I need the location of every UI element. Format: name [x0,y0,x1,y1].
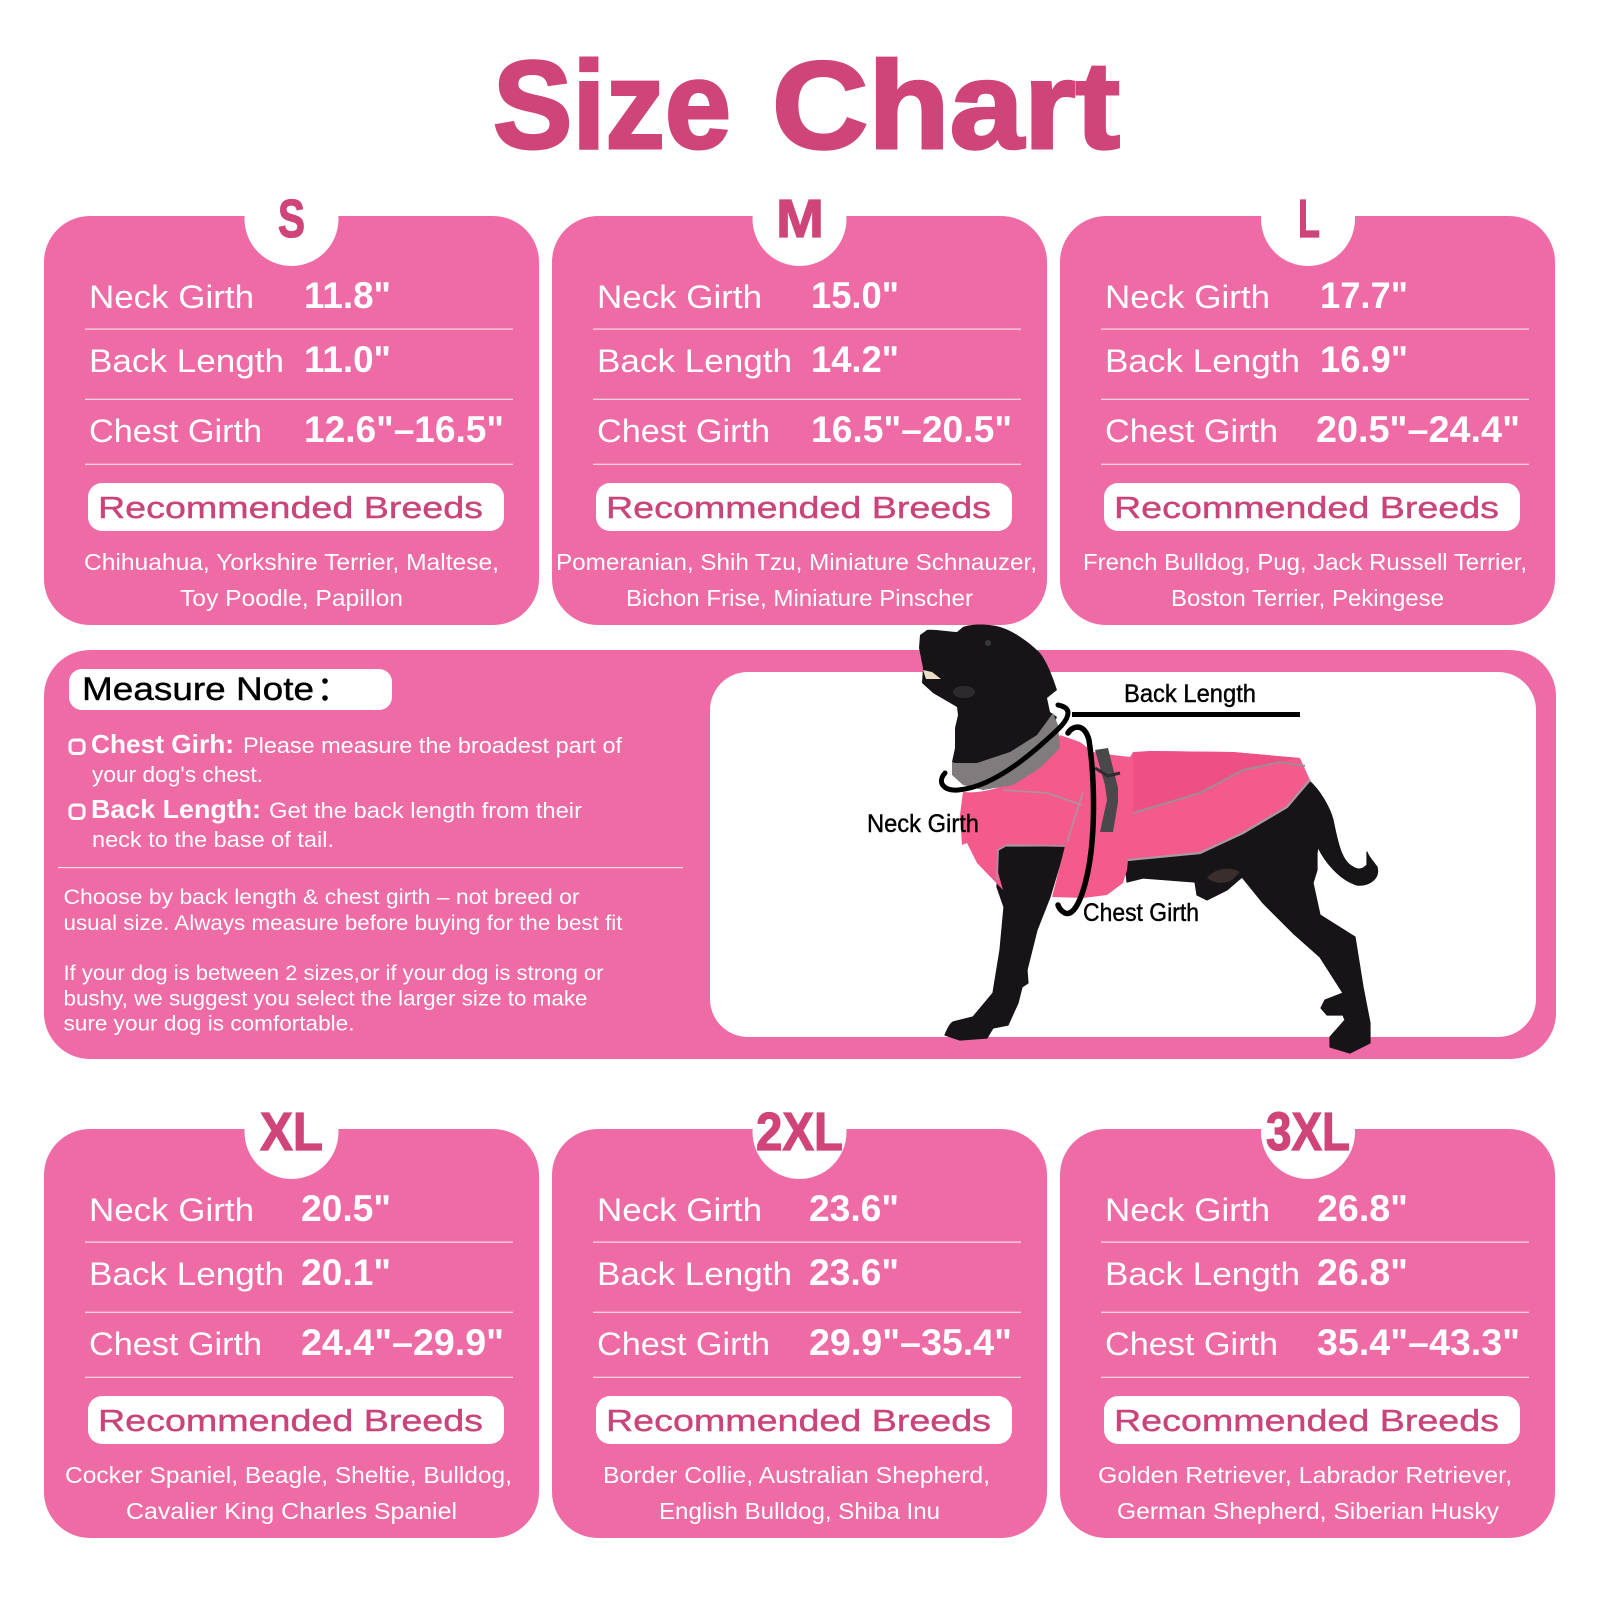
recommended breeds pill [596,1396,1012,1444]
chest girth row: Chest Girth [597,413,770,449]
chest girth note: your dog's chest. [92,762,263,787]
breed list: Pomeranian, Shih Tzu, Miniature Schnauzer, [556,549,1037,575]
back length row: 11.0" [304,339,391,380]
sizing advice text: Choose by back length & chest girth – not breed or [64,885,580,909]
sizing advice text [64,885,623,1036]
breed list: Chihuahua, Yorkshire Terrier, Maltese, [84,549,499,575]
neck girth row [597,275,899,316]
sizing advice text: sure your dog is comfortable. [64,1012,354,1036]
size label L: L [1298,189,1320,249]
recommended breeds pill: Recommended Breeds [1114,490,1499,525]
chest girth row: 24.4"–29.9" [301,1322,504,1363]
dog measurement illustration [867,624,1378,1053]
chest girth row: 20.5"–24.4" [1316,409,1520,450]
recommended breeds pill: Recommended Breeds [98,1403,483,1438]
back length row [597,339,899,380]
back length row [597,1252,899,1293]
back length row [1105,1252,1408,1293]
neck girth row: 26.8" [1317,1188,1408,1229]
neck girth row [1105,1188,1408,1229]
neck girth row [89,275,391,316]
back length row [89,339,391,380]
back length note: neck to the base of tail. [92,827,334,852]
chest girth row [89,409,504,450]
chest girth row: Chest Girth [89,413,262,449]
back length note: Get the back length from their [269,798,582,823]
neck girth row [597,1188,899,1229]
chest girth row [89,1322,504,1363]
panel: size L [1060,172,1555,625]
neck girth curve [941,705,1068,790]
sizing advice text: bushy, we suggest you select the larger size to make [64,986,588,1010]
back length row: Back Length [1105,1256,1300,1292]
label: back length: Back Length [1124,680,1256,708]
back length row: 16.9" [1320,339,1408,380]
chest girth row [597,409,1012,450]
breed list [65,1462,512,1524]
neck girth row: 11.8" [304,275,391,316]
size label XL: XL [260,1102,323,1162]
back length row: Back Length [89,1256,284,1292]
recommended breeds pill [1104,483,1520,531]
neck girth row: Neck Girth [1105,1192,1270,1228]
neck girth row: Neck Girth [597,279,762,315]
chest girth row: 16.5"–20.5" [811,409,1012,450]
breed list: German Shepherd, Siberian Husky [1117,1498,1500,1524]
neck girth row [89,1188,391,1229]
panel: size 2XL [552,1085,1047,1538]
size label M: M [776,189,824,249]
breed list [84,549,499,611]
measure note heading pill [69,669,392,710]
neck girth row: 23.6" [809,1188,899,1229]
chest girth row [1105,1322,1520,1363]
chest girth note: Please measure the broadest part of [243,733,623,758]
title: Size [493,37,731,175]
neck girth row: Neck Girth [89,279,254,315]
back length row: 26.8" [1317,1252,1408,1293]
recommended breeds pill [596,483,1012,531]
chest girth row: 12.6"–16.5" [304,409,504,450]
dog body and legs [945,780,1378,1053]
neck girth row: 15.0" [811,275,899,316]
panel: size M [552,172,1047,625]
breed list [1083,549,1527,611]
measure note heading pill: Measure Note [82,671,314,707]
label: neck girth: Neck Girth [867,810,979,838]
back length row: Back Length [597,1256,792,1292]
dog head and neck [919,624,1057,768]
recommended breeds pill [1104,1396,1520,1444]
back length row [89,1252,391,1293]
fleece collar [952,713,1060,790]
back length row [1105,339,1408,380]
breed list: English Bulldog, Shiba Inu [659,1498,940,1524]
chest girth row: Chest Girth [1105,413,1278,449]
neck girth row: 17.7" [1320,275,1408,316]
size label 2XL: 2XL [756,1102,843,1162]
breed list: Bichon Frise, Miniature Pinscher [626,585,973,611]
sizing advice text: If your dog is between 2 sizes,or if your dog is strong or [64,961,604,985]
back length row: Back Length [597,343,792,379]
chest girth row: Chest Girth [1105,1326,1278,1362]
white image inset [710,672,1536,1037]
back length note: Back Length: [91,794,261,824]
panel: size S [44,172,539,625]
back length row: 20.1" [301,1252,391,1293]
breed list [1098,1462,1512,1524]
back length line [1072,712,1300,717]
panel: size XL [44,1085,539,1538]
chest girth row: Chest Girth [597,1326,770,1362]
back length row: Back Length [89,343,284,379]
sizing advice text: usual size. Always measure before buying for the best fit [64,911,623,935]
recommended breeds pill [88,1396,504,1444]
size label S: S [278,189,305,249]
back length row: Back Length [1105,343,1300,379]
back length row: 14.2" [811,339,899,380]
breed list: Cavalier King Charles Spaniel [126,1498,457,1524]
breed list: Boston Terrier, Pekingese [1171,585,1444,611]
neck girth row: Neck Girth [597,1192,762,1228]
recommended breeds pill [88,483,504,531]
breed list: Golden Retriever, Labrador Retriever, [1098,1462,1512,1488]
chest girth row [1105,409,1520,450]
panel: size 3XL [1060,1085,1555,1538]
title [493,37,1120,175]
chest girth row: 35.4"–43.3" [1317,1322,1520,1363]
recommended breeds pill: Recommended Breeds [606,1403,991,1438]
recommended breeds pill: Recommended Breeds [1114,1403,1499,1438]
chest girth row: Chest Girth [89,1326,262,1362]
neck girth row: 20.5" [301,1188,391,1229]
dog coat [960,735,1310,898]
title: Chart [772,37,1120,175]
panel: measure note [44,650,1556,1059]
neck girth row: Neck Girth [1105,279,1270,315]
breed list: Cocker Spaniel, Beagle, Sheltie, Bulldog, [65,1462,512,1488]
breed list [603,1462,990,1524]
breed list: French Bulldog, Pug, Jack Russell Terrier, [1083,549,1527,575]
size label 3XL: 3XL [1266,1102,1350,1162]
back length row: 23.6" [809,1252,899,1293]
recommended breeds pill: Recommended Breeds [606,490,991,525]
chest girth row: 29.9"–35.4" [809,1322,1012,1363]
breed list: Border Collie, Australian Shepherd, [603,1462,990,1488]
label: chest girth: Chest Girth [1083,899,1199,927]
back length note [70,794,582,852]
chest girth note [70,729,623,787]
breed list [556,549,1037,611]
chest girth row [597,1322,1012,1363]
breed list: Toy Poodle, Papillon [180,585,403,611]
recommended breeds pill: Recommended Breeds [98,490,483,525]
neck girth row: Neck Girth [89,1192,254,1228]
chest girth curve [1058,727,1094,913]
neck girth row [1105,275,1408,316]
chest girth note: Chest Girh: [91,729,234,759]
